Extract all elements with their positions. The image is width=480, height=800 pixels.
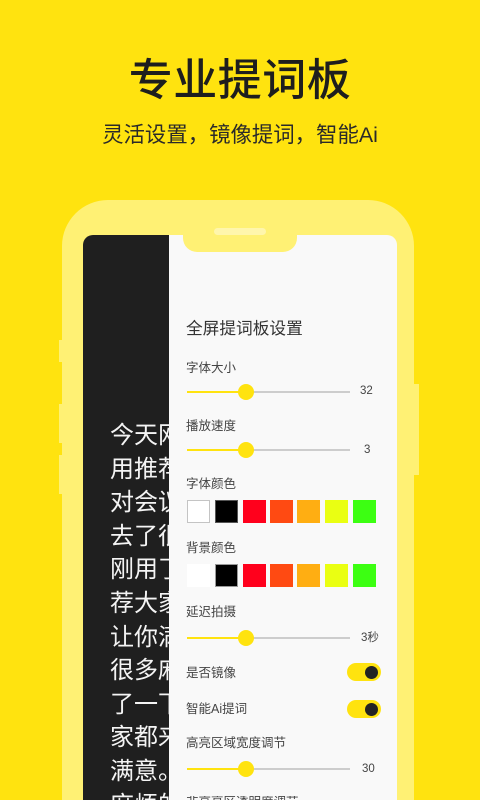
slider: delay	[187, 637, 350, 639]
label: font colour: 字体颜色	[186, 477, 236, 491]
panel heading: 全屏提词板设置	[186, 319, 303, 338]
settings panel	[169, 235, 397, 800]
speaker	[214, 228, 266, 235]
value: delay: 3秒	[361, 632, 379, 644]
slider: font size	[187, 391, 350, 393]
title: 专业提词板	[129, 56, 351, 105]
label: smart AI: 智能Ai提词	[186, 702, 247, 716]
toggle: mirror	[347, 663, 381, 681]
dark teleprompter screen	[83, 235, 169, 800]
value: speed: 3	[364, 444, 370, 456]
slider: speed	[187, 449, 350, 451]
value: font size: 32	[360, 385, 373, 397]
label: delay: 延迟拍摄	[186, 605, 236, 619]
value: highlight width: 30	[362, 763, 375, 775]
teleprompter text	[110, 422, 169, 800]
swatches: background colour	[215, 564, 376, 587]
phone body	[62, 200, 414, 800]
label: font size: 字体大小	[186, 361, 236, 375]
slider: highlight width	[187, 768, 350, 770]
label: highlight width: 高亮区域宽度调节	[186, 736, 286, 750]
notch	[183, 235, 297, 252]
label: mirror: 是否镜像	[186, 666, 236, 680]
label: speed: 播放速度	[186, 419, 236, 433]
toggle: smart AI	[347, 700, 381, 718]
label: background colour: 背景颜色	[186, 541, 236, 555]
subtitle: 灵活设置，镜像提词，智能Ai	[102, 123, 378, 147]
swatches: font colour	[187, 500, 376, 523]
